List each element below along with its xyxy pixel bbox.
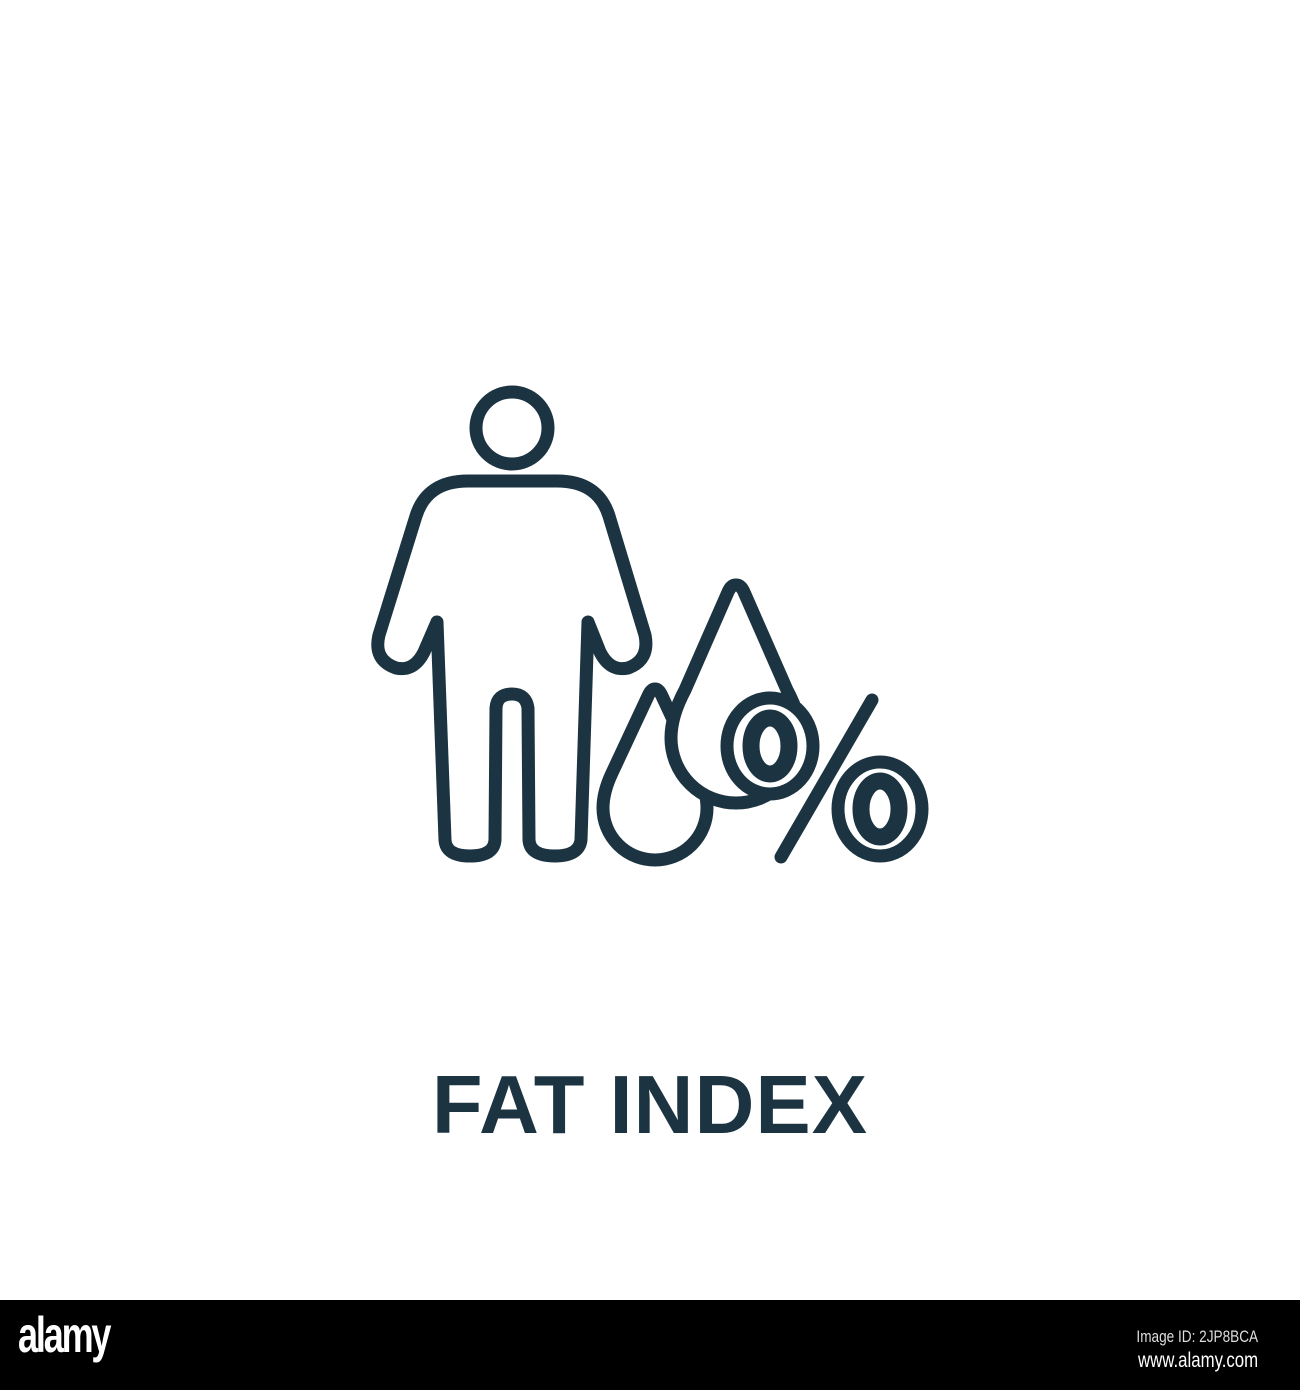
icon: person with fat drops and percent [371,386,928,866]
image id and url: www.alamy.com [1138,1349,1258,1372]
icon: body [378,481,646,856]
image id and url [1136,1327,1258,1372]
logo: alamy [18,1307,109,1363]
image id and url: Image ID: 2JP8BCA [1136,1327,1258,1346]
icon: small drop [603,689,707,860]
icon: percent bottom zero [838,762,922,856]
footer bar [0,1300,1300,1390]
icon: percent slash [781,700,872,857]
icon: big drop [671,585,801,803]
icon: percent top zero [727,698,813,794]
title: FAT INDEX [432,1058,868,1151]
icon: head [476,392,548,464]
